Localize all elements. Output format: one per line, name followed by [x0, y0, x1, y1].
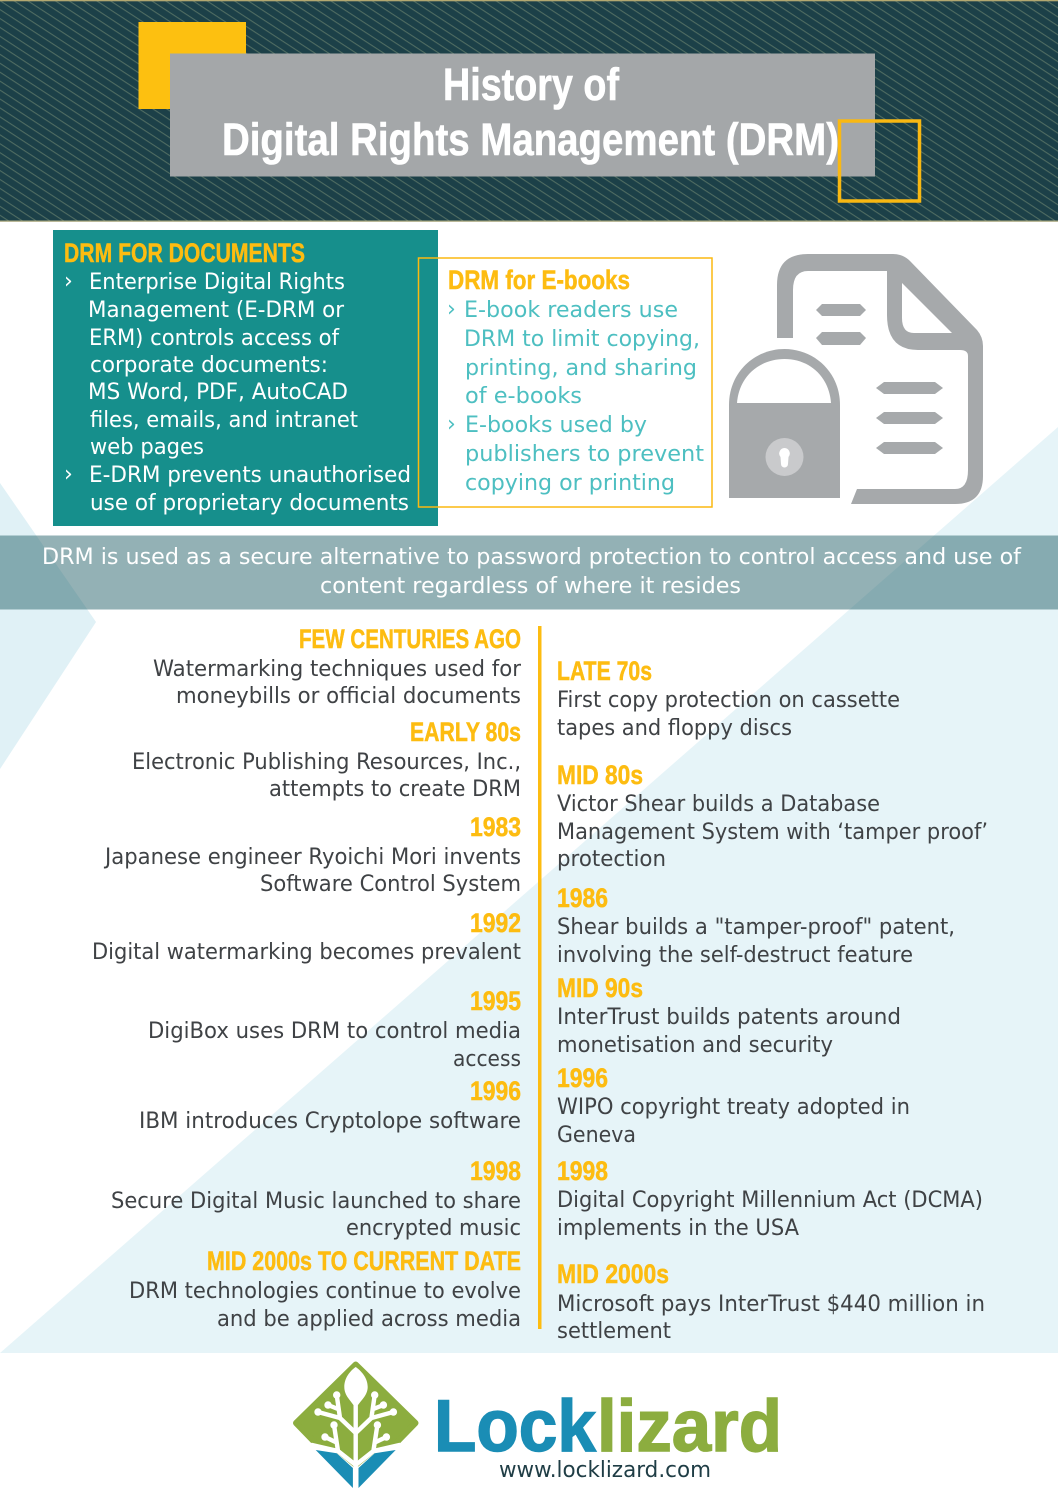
entry: 1998: [557, 1156, 983, 1241]
bullet text: documents: Management (E-DRM or: [88, 298, 345, 323]
entry: 1998: 1998: [470, 1156, 521, 1186]
grey title panel: [170, 54, 875, 176]
entry: 1983: [103, 812, 521, 897]
bullet text: e-books: copying or printing: [465, 471, 675, 496]
entry: mid 90s: monetisation and security: [557, 1033, 833, 1058]
entry: 1986: Shear builds a "tamper-proof" patent,: [557, 915, 955, 940]
entry: 1998: Secure Digital Music launched to share: [111, 1189, 521, 1214]
panel: DRM for documents: [53, 230, 438, 526]
entry: early 80s: Electronic Publishing Resources, Inc.,: [132, 750, 521, 775]
bullet text: e-books: printing, and sharing: [465, 356, 697, 381]
wordmark: lizard: [597, 1386, 782, 1467]
background: left pale blue chevron: [0, 483, 96, 769]
entry: mid 90s: InterTrust builds patents around: [557, 1005, 901, 1030]
entry: 1983: Japanese engineer Ryoichi Mori invents: [103, 845, 521, 870]
bullet text: documents: E-DRM prevents unauthorised: [89, 463, 411, 488]
wordmark: [434, 1386, 782, 1467]
bullet text: e-books: ›: [447, 412, 456, 437]
callout band: DRM is used as a secure alternative to password protection to control access and use of: [42, 545, 1022, 570]
entry: mid 2000s: [557, 1259, 985, 1344]
entry: mid 80s: [557, 760, 988, 872]
background: large pale blue triangle: [0, 427, 1058, 1353]
entry: 1996: [557, 1063, 910, 1148]
entry: mid 2000s to current date: and be applied across media: [217, 1307, 521, 1332]
entry: 1995: 1995: [470, 986, 521, 1016]
document outline: [777, 254, 983, 504]
entry: 1992: Digital watermarking becomes prevalent: [92, 940, 521, 965]
yellow outline square: [840, 121, 920, 201]
entry: late 70s: tapes and floppy discs: [557, 716, 792, 741]
entry: late 70s: First copy protection on cassette: [557, 688, 900, 713]
entry: late 70s: LATE 70s: [557, 656, 652, 686]
entry: 1996: 1996: [470, 1076, 521, 1106]
entry: 1995: [148, 986, 521, 1072]
entry: 1986: 1986: [557, 883, 608, 913]
bullet text: documents: files, emails, and intranet: [90, 408, 358, 433]
entry: 1998: encrypted music: [346, 1216, 521, 1241]
bullet text: documents: web pages: [90, 435, 204, 460]
bullet text: documents: Enterprise Digital Rights: [89, 270, 345, 295]
title: [222, 59, 839, 165]
entry: mid 2000s: Microsoft pays InterTrust $440 million in: [557, 1292, 985, 1317]
bullet text: documents: MS Word, PDF, AutoCAD: [88, 380, 348, 405]
entry: early 80s: EARLY 80s: [410, 717, 521, 747]
entry: mid 80s: Victor Shear builds a Database: [557, 792, 880, 817]
entry: 1995: DigiBox uses DRM to control media: [148, 1019, 521, 1044]
bullet text: e-books: of e-books: [465, 384, 582, 409]
entry: mid 80s: Management System with ‘tamper proof’: [557, 820, 988, 845]
entry: 1996: [139, 1076, 521, 1134]
entry: mid 90s: [557, 973, 901, 1058]
entry: 1998: implements in the USA: [557, 1216, 799, 1241]
wordmark: Lock: [434, 1386, 596, 1467]
bullet text: e-books: DRM to limit copying,: [464, 327, 700, 352]
entry: 1998: [111, 1156, 521, 1241]
title: History of: [443, 59, 620, 110]
bullet text: e-books: E-books used by: [465, 413, 647, 438]
entry: few centuries ago: moneybills or official documents: [176, 684, 521, 709]
entry: few centuries ago: [153, 624, 522, 709]
callout band: content regardless of where it resides: [320, 574, 741, 599]
entry: 1996: IBM introduces Cryptolope software: [139, 1109, 521, 1134]
bullet text: e-books: ›: [447, 297, 456, 322]
bullet text: documents: use of proprietary documents: [90, 491, 409, 516]
entry: mid 90s: MID 90s: [557, 973, 643, 1003]
entry: 1992: [92, 908, 521, 965]
yellow accent square: [138, 22, 246, 109]
entry: mid 2000s to current date: DRM technologies continue to evolve: [129, 1279, 521, 1304]
logo: Locklizard: [296, 1364, 782, 1489]
document text lines: [816, 304, 943, 454]
bullet text: documents: [64, 269, 411, 516]
entry: 1986: [557, 883, 955, 968]
entry: 1996: Geneva: [557, 1123, 636, 1148]
entry: mid 80s: MID 80s: [557, 760, 643, 790]
bullet text: e-books: [447, 297, 704, 496]
bullet text: documents: ERM) controls access of: [89, 326, 340, 351]
entry: 1998: 1998: [557, 1156, 608, 1186]
heading: DRM for documents: DRM FOR DOCUMENTS: [64, 238, 305, 268]
folded corner: [902, 283, 952, 333]
timeline centre bar: [538, 626, 542, 1329]
bullet text: e-books: publishers to prevent: [465, 442, 704, 467]
timeline: right column: [557, 656, 988, 1344]
bullet text: documents: ›: [64, 269, 73, 294]
entry: mid 2000s to current date: MID 2000s TO CURRENT DATE: [207, 1246, 521, 1276]
entry: mid 2000s: settlement: [557, 1319, 671, 1344]
entry: 1986: involving the self-destruct feature: [557, 943, 913, 968]
entry: 1996: WIPO copyright treaty adopted in: [557, 1095, 910, 1120]
bullet text: e-books: E-book readers use: [464, 298, 678, 323]
entry: early 80s: attempts to create DRM: [269, 777, 521, 802]
bullet text: documents: ›: [64, 462, 73, 487]
entry: 1983: 1983: [470, 812, 521, 842]
timeline: left column: [92, 624, 522, 1332]
entry: few centuries ago: FEW CENTURIES AGO: [299, 624, 521, 654]
title: Digital Rights Management (DRM): [222, 114, 839, 165]
entry: 1996: 1996: [557, 1063, 608, 1093]
entry: mid 2000s: MID 2000s: [557, 1259, 669, 1289]
entry: few centuries ago: Watermarking techniques used for: [153, 657, 522, 682]
entry: early 80s: [132, 717, 521, 802]
entry: 1995: access: [453, 1047, 521, 1072]
entry: late 70s: [557, 656, 900, 741]
panel: DRM for e-books: [418, 258, 712, 507]
icon: document with padlock: [729, 254, 983, 504]
entry: 1998: Digital Copyright Millennium Act (DCMA): [557, 1188, 983, 1213]
entry: mid 2000s to current date: [129, 1246, 521, 1332]
heading: DRM for e-books: DRM for E-books: [448, 265, 630, 295]
header banner: [0, 0, 1058, 222]
website url: www.locklizard.com: [499, 1458, 711, 1483]
icon: tree diamond: [296, 1364, 416, 1489]
bullet text: documents: corporate documents:: [90, 353, 328, 378]
entry: 1983: Software Control System: [260, 872, 521, 897]
callout band: [0, 536, 1058, 610]
entry: mid 80s: protection: [557, 847, 666, 872]
entry: 1992: 1992: [470, 908, 521, 938]
padlock: [729, 349, 840, 498]
